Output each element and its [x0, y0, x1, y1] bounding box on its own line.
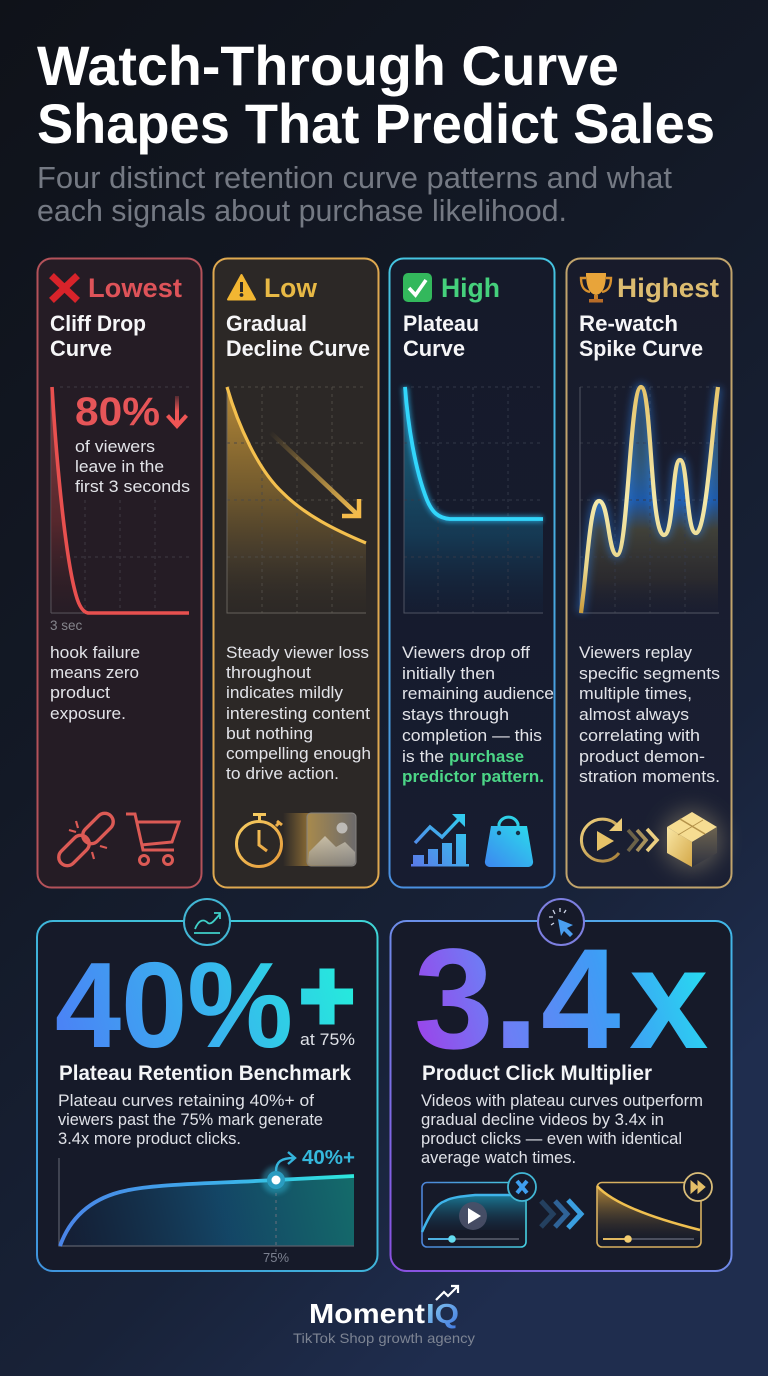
body text: Viewers replay — [579, 643, 693, 662]
body text: interesting content — [226, 704, 370, 723]
heading: gradual decline curve — [226, 311, 370, 361]
body text: hook failure — [50, 643, 140, 662]
body text: product — [50, 683, 110, 702]
chart: gradual decline — [227, 387, 366, 613]
stat: 40%+: 40% — [55, 937, 293, 1073]
subtitle: Four distinct retention curve patterns and what — [37, 160, 672, 195]
body text — [402, 643, 554, 766]
title: Shapes That Predict Sales — [37, 92, 715, 155]
heading: re-watch spike curve: Re-watch — [579, 311, 678, 336]
icon: trophy — [581, 273, 611, 302]
body text: stration moments. — [579, 767, 720, 786]
body text: to drive action. — [226, 764, 339, 783]
icon: stopwatch — [236, 814, 282, 866]
body text: initially then — [402, 664, 495, 683]
stat caption — [75, 437, 190, 496]
body text: but nothing — [226, 724, 313, 743]
icon: chevrons — [628, 829, 657, 851]
body text — [421, 1092, 703, 1167]
icon: green check — [403, 273, 432, 302]
icon: image fading — [283, 813, 356, 866]
arrow: decline — [270, 432, 358, 515]
heading: gradual decline curve: Gradual — [226, 311, 307, 336]
stat caption: first 3 seconds — [75, 477, 190, 496]
heading: cliff drop curve — [50, 311, 146, 361]
rating: lowest: Lowest — [88, 273, 182, 303]
icon badge: cursor click — [538, 899, 584, 945]
body text: remaining audience — [402, 684, 554, 703]
chart: re-watch spikes — [580, 387, 719, 613]
heading: re-watch spike curve: Spike Curve — [579, 336, 703, 361]
body text: viewers past the 75% mark generate — [58, 1111, 323, 1129]
panel: product click multiplier — [390, 886, 732, 1271]
logo: momentiq: IQ — [426, 1298, 459, 1329]
highlight: purchase predictor pattern: predictor pattern. — [402, 767, 544, 786]
arrow: down — [168, 396, 186, 426]
icon: broken link — [55, 810, 117, 869]
body text: indicates mildly — [226, 683, 344, 702]
heading: gradual decline curve: Decline Curve — [226, 336, 370, 361]
panel: re-watch spike curve — [566, 258, 732, 888]
body text — [579, 643, 720, 786]
body text: multiple times, — [579, 684, 692, 703]
badge: x mark — [508, 1173, 536, 1201]
body text — [226, 643, 371, 783]
icon: red cross — [54, 278, 75, 298]
heading: plateau curve: Curve — [403, 336, 465, 361]
stat caption: of viewers — [75, 437, 155, 456]
stat: 3.4x: . — [491, 886, 541, 1087]
icon: replay — [581, 818, 622, 861]
stat: 3.4x: 3 — [414, 920, 494, 1079]
chart: retention benchmark — [59, 1147, 355, 1265]
icon badge: trend — [184, 899, 230, 945]
badge: fast forward — [684, 1173, 712, 1201]
arrow: chevrons — [541, 1200, 581, 1228]
body text — [58, 1092, 323, 1148]
body text: average watch times. — [421, 1149, 576, 1167]
callout: 40%+: 40%+ — [302, 1147, 355, 1169]
icon: shopping bag — [485, 817, 533, 867]
body text: Videos with plateau curves outperform — [421, 1092, 703, 1110]
arrow: curved callout — [276, 1152, 295, 1171]
body text: throughout — [226, 663, 311, 682]
icon: shopping cart — [126, 814, 179, 864]
panel: plateau curve — [390, 258, 554, 888]
panel: gradual decline curve — [214, 258, 378, 888]
heading: plateau curve — [403, 311, 479, 361]
rating: low: Low — [264, 273, 318, 303]
title: Watch-Through Curve — [37, 34, 619, 97]
rating: highest: Highest — [617, 273, 719, 303]
body text: product clicks — even with identical — [421, 1130, 682, 1148]
body text: exposure. — [50, 704, 126, 723]
logo: momentiq — [309, 1286, 459, 1329]
stat: 80%: 80% — [75, 390, 160, 434]
stat caption: leave in the — [75, 457, 164, 476]
heading: Product Click Multiplier — [422, 1062, 652, 1085]
heading: Plateau Retention Benchmark — [59, 1062, 351, 1085]
panel: plateau retention benchmark — [37, 899, 378, 1271]
body text: gradual decline videos by 3.4x in — [421, 1111, 664, 1129]
marker: 75% point — [262, 1166, 290, 1194]
chart: cliff drop — [51, 387, 189, 613]
stat: 3.4x: x — [629, 920, 709, 1079]
highlight: purchase predictor pattern — [402, 747, 544, 786]
body text: 3.4x more product clicks. — [58, 1130, 241, 1148]
icon: logo arrow — [436, 1286, 458, 1300]
highlight: purchase predictor pattern: purchase — [449, 747, 524, 766]
title — [37, 34, 715, 155]
tagline: TikTok Shop growth agency — [293, 1330, 475, 1346]
body text: is the — [402, 747, 444, 766]
icon: warning triangle — [228, 275, 255, 300]
body text: stays through — [402, 705, 509, 724]
body text: correlating with — [579, 726, 700, 745]
stat: 40%+: + — [300, 940, 354, 1052]
icon: growth bars — [411, 814, 469, 866]
stat: 3.4x: 4 — [541, 920, 621, 1079]
mini chart: gradual decline video — [597, 1173, 712, 1247]
subtitle — [37, 160, 672, 228]
heading: plateau curve: Plateau — [403, 311, 479, 336]
mini chart: plateau video — [422, 1173, 536, 1247]
body text: compelling enough — [226, 744, 371, 763]
body text: Plateau curves retaining 40%+ of — [58, 1092, 314, 1110]
body text — [50, 643, 140, 723]
panel: cliff drop curve — [38, 258, 202, 888]
body text: means zero — [50, 663, 139, 682]
heading: cliff drop curve: Curve — [50, 336, 112, 361]
body text: specific segments — [579, 664, 720, 683]
axis label: 75%: 75% — [263, 1250, 289, 1265]
body text: almost always — [579, 705, 689, 724]
icon: product box — [662, 810, 722, 870]
body text: Steady viewer loss — [226, 643, 369, 662]
chart: plateau — [404, 387, 543, 613]
body text: Viewers drop off — [402, 643, 530, 662]
logo: momentiq: Moment — [309, 1298, 425, 1329]
body text: product demon- — [579, 747, 705, 766]
heading: cliff drop curve: Cliff Drop — [50, 311, 146, 336]
stat qualifier: at 75% — [300, 1031, 355, 1049]
rating: high: High — [441, 273, 500, 303]
heading: re-watch spike curve — [579, 311, 703, 361]
subtitle: each signals about purchase likelihood. — [37, 193, 567, 228]
axis label: 3 sec — [50, 618, 83, 633]
body text: completion — this — [402, 726, 542, 745]
